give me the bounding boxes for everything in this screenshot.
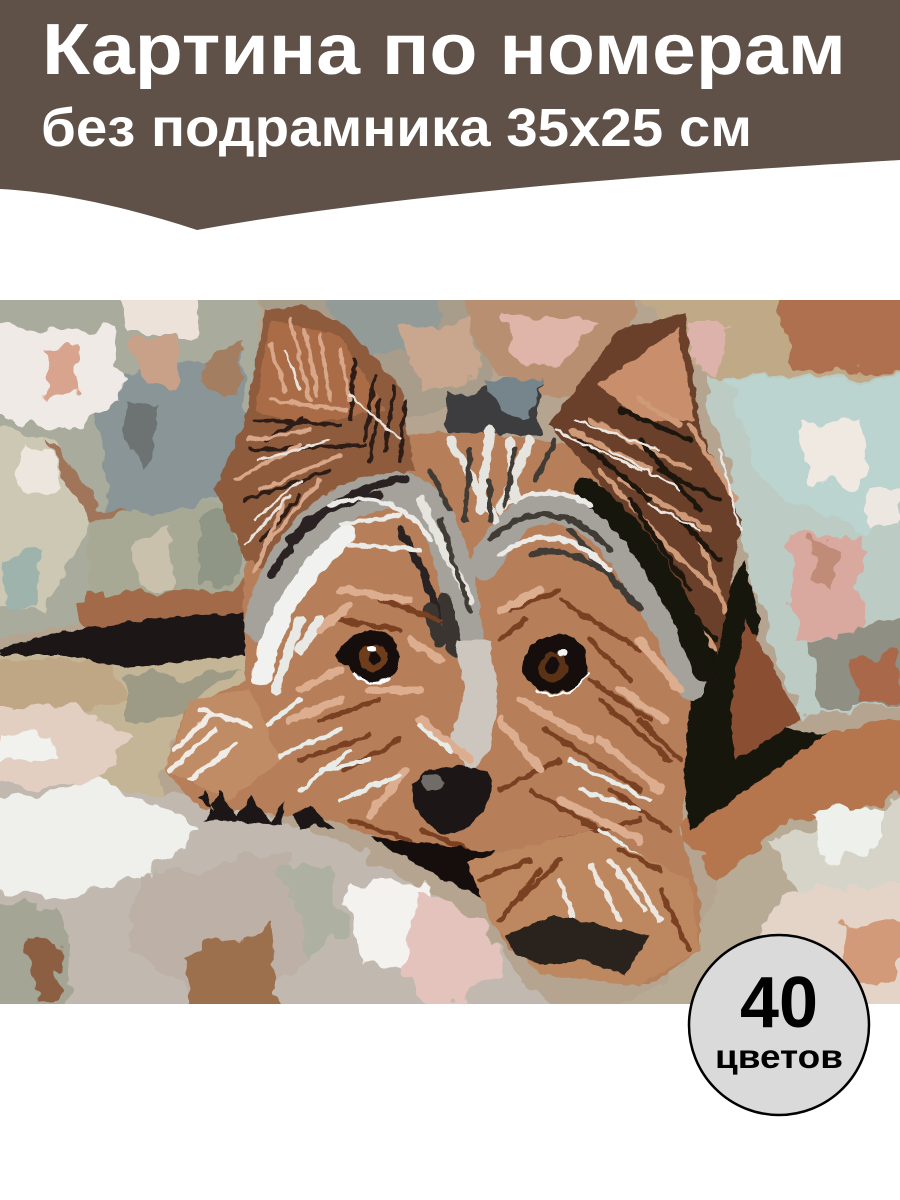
right paw — [468, 830, 700, 985]
left ear colour — [255, 320, 385, 425]
header banner — [0, 0, 900, 230]
painting: dark shadow behind dog — [680, 560, 825, 830]
lower left claws — [292, 805, 334, 830]
centre blaze — [450, 640, 498, 775]
right ear — [548, 313, 742, 655]
badge number: 40 — [740, 963, 818, 1043]
mouth shadow — [370, 838, 495, 898]
right ear fur strokes — [555, 400, 740, 660]
badge: 40 colours — [689, 935, 869, 1115]
painting: dog's right ear flap — [730, 620, 800, 760]
left eye — [335, 631, 399, 683]
left paw fur — [165, 690, 280, 800]
painting: dog group — [0, 305, 825, 985]
face fur strokes — [266, 584, 684, 857]
left paw claws — [198, 790, 285, 825]
right eye — [522, 635, 588, 694]
painting: yorkshire terrier on floral cushions — [0, 270, 900, 1030]
painting background: floral upholstery — [0, 270, 900, 715]
painting: dog head — [165, 305, 742, 985]
right inner ear — [598, 328, 695, 422]
title: Картина по номерам — [42, 10, 846, 90]
painting: black stripe on the left — [0, 613, 250, 668]
subtitle: без подрамника 35х25 см — [41, 98, 752, 158]
left ear — [215, 305, 415, 570]
right paw claws — [505, 915, 650, 975]
left ear fur strokes — [235, 320, 405, 570]
right paw fur strokes — [480, 850, 690, 950]
badge label: цветов — [715, 1038, 843, 1075]
forehead and brows — [262, 430, 705, 690]
nose — [412, 766, 493, 835]
painting foreground: blanket — [0, 654, 900, 1004]
